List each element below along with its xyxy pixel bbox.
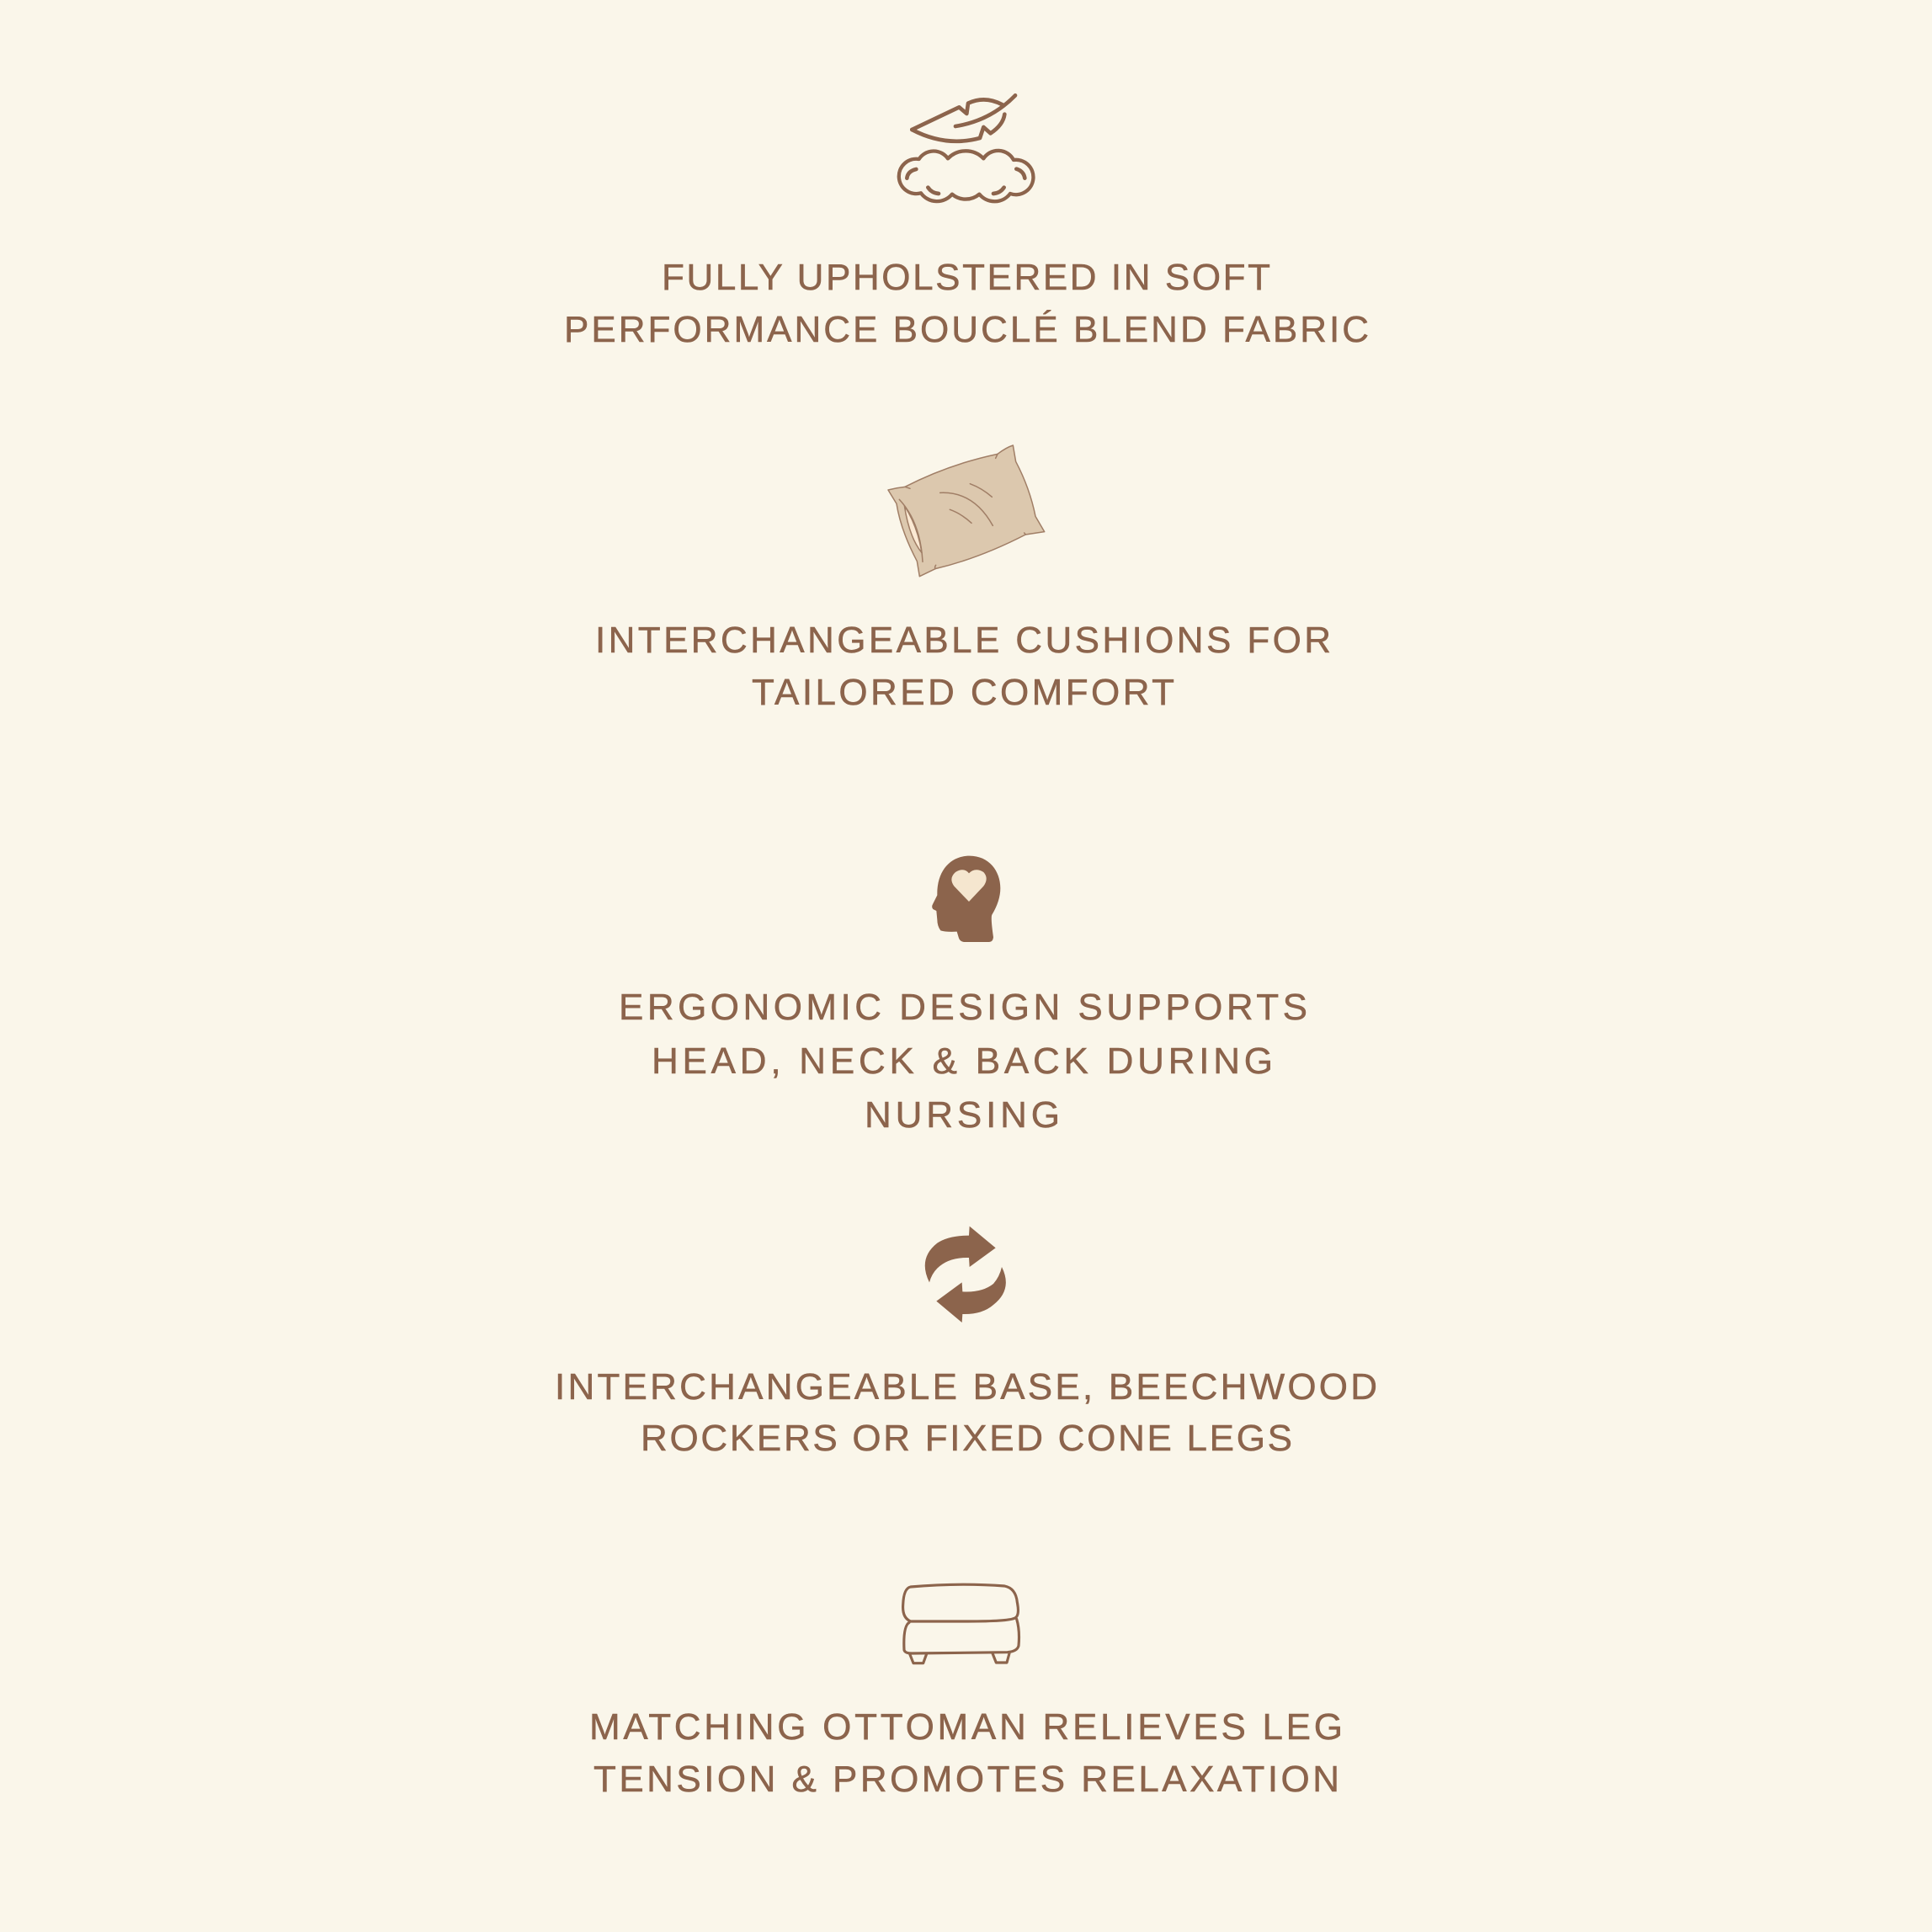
text: interchangeable cushions bbox=[595, 620, 1331, 713]
text: interchangeable base: INTERCHANGEABLE BASE, BEECHWOOD bbox=[555, 1366, 1377, 1408]
text: interchangeable base bbox=[555, 1366, 1377, 1459]
text: interchangeable base: ROCKERS OR FIXED CONE LEGS bbox=[641, 1418, 1292, 1459]
text: ergonomic design: HEAD, NECK & BACK DURING bbox=[652, 1041, 1273, 1082]
icon: ottoman bbox=[903, 1584, 1019, 1663]
text: interchangeable cushions: TAILORED COMFORT bbox=[752, 672, 1174, 713]
icon: swap arrows bbox=[925, 1227, 1006, 1323]
text: matching ottoman: MATCHING OTTOMAN RELIEVES LEG bbox=[589, 1706, 1343, 1748]
text: interchangeable cushions: INTERCHANGEABLE CUSHIONS FOR bbox=[595, 620, 1331, 661]
text: matching ottoman bbox=[589, 1706, 1343, 1800]
text: ergonomic design bbox=[619, 987, 1307, 1136]
text: fully upholstered: FULLY UPHOLSTERED IN SOFT bbox=[662, 257, 1270, 298]
text: ergonomic design: ERGONOMIC DESIGN SUPPORTS bbox=[619, 987, 1307, 1028]
icon: head with heart bbox=[932, 856, 1000, 942]
text: matching ottoman: TENSION & PROMOTES RELAXATION bbox=[593, 1759, 1339, 1800]
text: ergonomic design: NURSING bbox=[865, 1094, 1060, 1136]
icon: feather above cloud bbox=[899, 95, 1033, 201]
text: fully upholstered: PERFORMANCE BOUCLÉ BLEND FABRIC bbox=[564, 309, 1369, 350]
text: fully upholstered bbox=[564, 257, 1369, 350]
icon: pillow bbox=[888, 445, 1045, 577]
